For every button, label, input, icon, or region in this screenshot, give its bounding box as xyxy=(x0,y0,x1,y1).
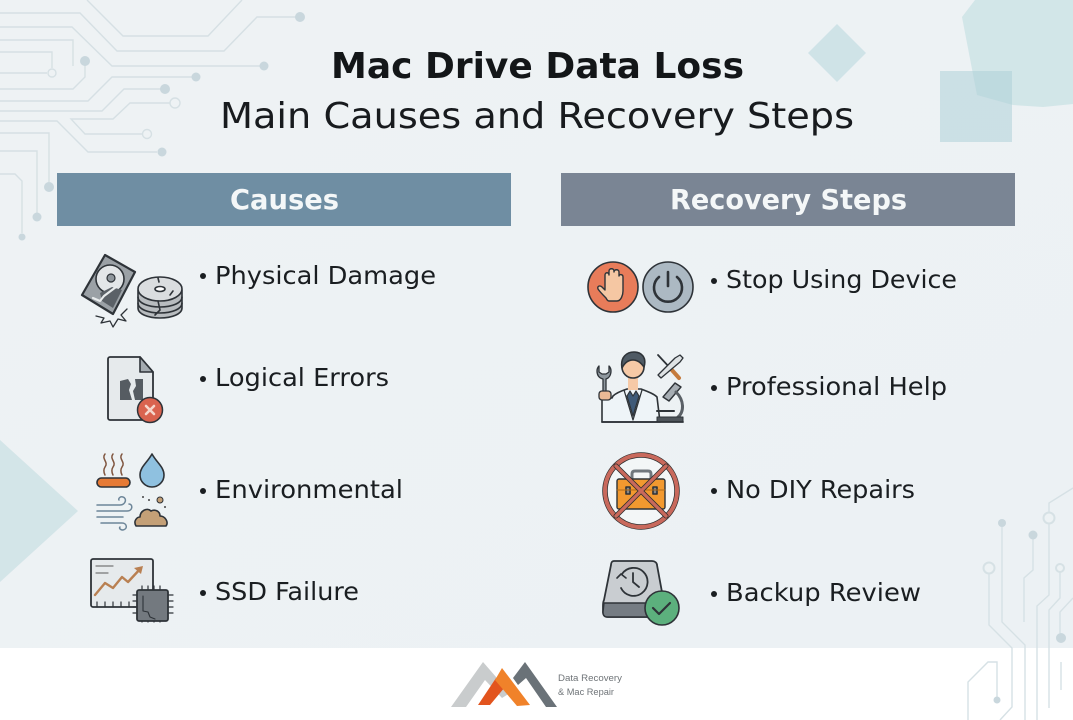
logo text: Data Recovery xyxy=(558,673,623,683)
text: ssd failure: SSD Failure xyxy=(215,577,359,606)
logo mark: orange stroke xyxy=(495,668,530,706)
decorative circuit: top left xyxy=(0,0,305,240)
text: stop using device: Stop Using Device xyxy=(726,265,957,294)
icon: backup drive with check xyxy=(603,561,679,625)
panel: causes header xyxy=(57,173,511,226)
footer band xyxy=(0,648,1073,720)
decorative circuit: bottom right xyxy=(968,488,1073,720)
title xyxy=(220,46,854,137)
title line 2: Main Causes and Recovery Steps xyxy=(220,96,854,137)
decorative shape: left diamond xyxy=(0,440,78,582)
panel: recovery steps header: Recovery Steps xyxy=(670,183,907,216)
panel: causes header: Causes xyxy=(230,183,339,216)
title line 1: Mac Drive Data Loss xyxy=(331,46,744,87)
text: professional help: Professional Help xyxy=(726,372,947,401)
icon: corrupted file xyxy=(108,357,162,422)
icon: technician with tools xyxy=(597,352,683,422)
decorative shape: diamond xyxy=(808,24,866,82)
icon: no diy repairs xyxy=(605,455,677,527)
logo mark: red stroke xyxy=(478,678,505,705)
decorative shape: top right blob xyxy=(962,0,1073,107)
icon: ssd failure chart and chip xyxy=(91,559,173,622)
logo xyxy=(451,662,623,707)
text: environmental: Environmental xyxy=(215,475,403,504)
icon: damaged hard drive and disks xyxy=(82,255,182,327)
decorative shape: square xyxy=(940,71,1012,142)
logo mark: left chevron xyxy=(451,662,510,707)
logo: & Mac Repair xyxy=(558,687,614,697)
text: logical errors: Logical Errors xyxy=(215,363,389,392)
panel: recovery steps header xyxy=(561,173,1015,226)
icon: stop hand and power xyxy=(588,262,693,312)
text: no diy repairs: No DIY Repairs xyxy=(726,475,915,504)
text: physical damage: Physical Damage xyxy=(215,261,436,290)
logo mark: dark chevron xyxy=(513,662,557,707)
text: backup review: Backup Review xyxy=(726,578,921,607)
icon: environmental hazards xyxy=(97,454,167,530)
